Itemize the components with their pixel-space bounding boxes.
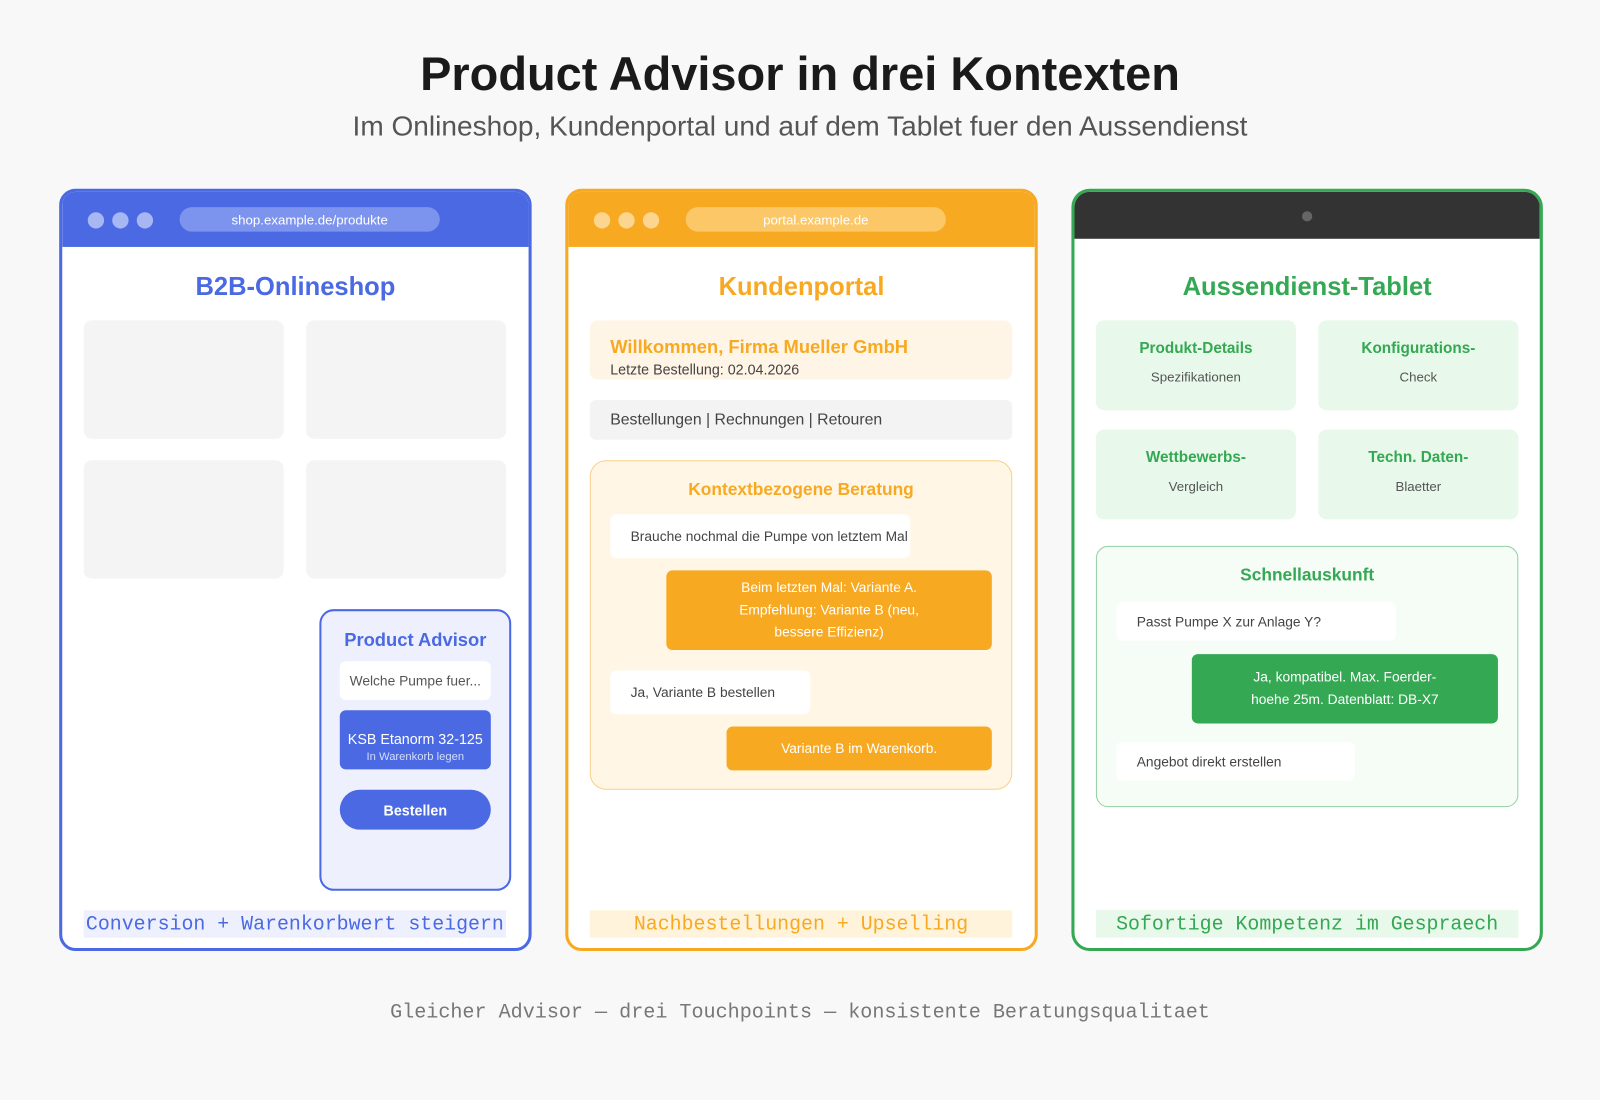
context advice chat: Ja, Variante B bestellen [631, 685, 775, 700]
context advice chat: Empfehlung: Variante B (neu, [739, 602, 919, 617]
feature tiles: Produkt-Details [1139, 340, 1252, 357]
subtitle: Im Onlineshop, Kundenportal und auf dem Tablet fuer den Aussendienst [353, 110, 1247, 142]
product advisor widget [319, 609, 511, 891]
panel: Kundenportal [565, 189, 1038, 951]
product advisor widget: Product Advisor [344, 629, 486, 649]
feature tiles: Check [1400, 369, 1437, 385]
tablet bezel with camera [1074, 192, 1540, 239]
product advisor widget: In Warenkorb legen [367, 751, 464, 763]
footer: goal [590, 910, 1012, 938]
context advice chat: Variante B im Warenkorb. [781, 741, 937, 756]
context advice chat: Brauche nochmal die Pumpe von letztem Mal [631, 529, 908, 544]
feature tiles: Blaetter [1395, 479, 1441, 494]
nav bar: Bestellungen | Rechnungen | Retouren [610, 411, 882, 429]
footer: goal: Sofortige Kompetenz im Gespraech [1116, 913, 1498, 935]
quick info chat: hoehe 25m. Datenblatt: DB-X7 [1251, 692, 1439, 707]
footer caption: Gleicher Advisor — drei Touchpoints — konsistente Beratungsqualitaet [390, 1001, 1210, 1023]
context advice chat [590, 460, 1012, 790]
browser header [568, 192, 1035, 247]
product advisor widget: KSB Etanorm 32-125 [348, 731, 483, 747]
feature tiles: Spezifikationen [1151, 369, 1241, 385]
quick info chat [1096, 546, 1518, 807]
context advice chat: bessere Effizienz) [774, 624, 884, 640]
product advisor widget: Welche Pumpe fuer... [350, 673, 481, 688]
heading: Kundenportal [719, 272, 884, 301]
browser header: shop.example.de/produkte [232, 212, 388, 227]
panel: Aussendienst-Tablet [1071, 189, 1543, 951]
footer: goal: Nachbestellungen + Upselling [634, 913, 968, 935]
welcome box: Letzte Bestellung: 02.04.2026 [610, 361, 799, 378]
quick info chat: Angebot direkt erstellen [1137, 754, 1281, 769]
heading: Aussendienst-Tablet [1183, 272, 1432, 301]
title: Product Advisor in drei Kontexten [420, 47, 1180, 100]
feature tiles: Wettbewerbs- [1146, 449, 1246, 466]
quick info chat: Schnellauskunft [1240, 565, 1374, 585]
panel: B2B-Onlineshop [59, 189, 532, 951]
product placeholders [84, 320, 506, 578]
footer: goal: Conversion + Warenkorbwert steigern [86, 913, 504, 935]
product advisor widget: Bestellen [384, 802, 447, 818]
browser header: portal.example.de [763, 212, 869, 227]
context advice chat: Kontextbezogene Beratung [688, 480, 914, 499]
welcome box: Willkommen, Firma Mueller GmbH [610, 337, 908, 357]
feature tiles: Techn. Daten- [1368, 449, 1468, 466]
feature tiles: Konfigurations- [1361, 340, 1475, 357]
heading: B2B-Onlineshop [195, 272, 395, 301]
quick info chat: Ja, kompatibel. Max. Foerder- [1253, 669, 1436, 685]
quick info chat: Passt Pumpe X zur Anlage Y? [1137, 614, 1321, 629]
feature tiles: Vergleich [1169, 479, 1223, 494]
browser header [62, 192, 529, 247]
feature tiles [1096, 320, 1518, 520]
nav bar [590, 400, 1012, 440]
welcome box [590, 320, 1012, 380]
context advice chat: Beim letzten Mal: Variante A. [741, 580, 917, 595]
